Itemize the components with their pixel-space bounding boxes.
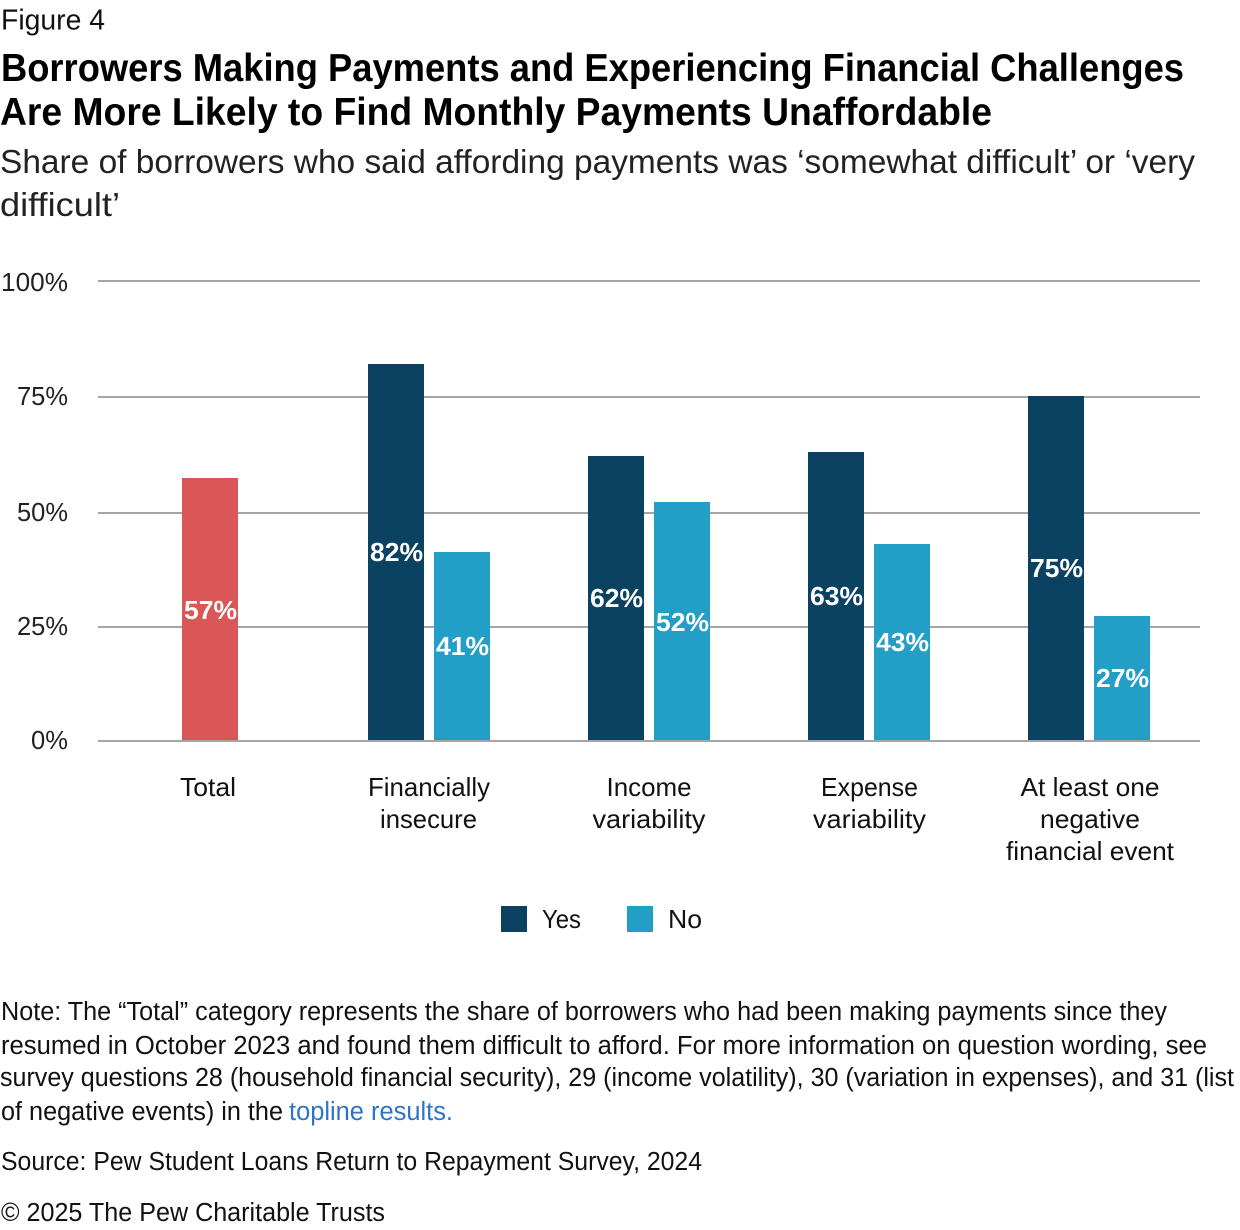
note: resumed in October 2023 and found them difficult to afford. For more information on question wording, see	[1, 1032, 1207, 1060]
y axis and grid lines: 50%	[17, 497, 68, 527]
group: income variability: 52%	[656, 607, 709, 637]
y axis and grid lines	[1, 267, 1200, 755]
group: at least one negative financial event: At least one	[1020, 772, 1160, 802]
note: of negative events) in the	[1, 1098, 283, 1126]
group: financially insecure: 41%	[436, 631, 489, 661]
group: financially insecure: insecure	[380, 804, 477, 834]
note: topline results.	[289, 1098, 453, 1126]
y axis and grid lines: 0%	[31, 725, 68, 755]
group: income variability	[588, 456, 710, 834]
note: survey questions 28 (household financial security), 29 (income volatility), 30 (variation in expenses), and 31 (list	[0, 1064, 1234, 1092]
group: expense variability: 43%	[876, 627, 929, 657]
group: total: Total	[180, 772, 236, 802]
group: at least one negative financial event: 27%	[1096, 663, 1149, 693]
group: total: 57%	[184, 595, 237, 625]
figure number: Figure 4	[1, 4, 105, 36]
group: total	[180, 478, 238, 802]
group: expense variability: variability	[813, 804, 926, 834]
y axis and grid lines: 25%	[17, 611, 68, 641]
subtitle	[0, 143, 1195, 223]
group: expense variability	[808, 452, 930, 834]
legend	[501, 904, 702, 934]
subtitle: difficult’	[0, 186, 120, 223]
bar chart	[1, 267, 1200, 866]
group: financially insecure: Financially	[368, 772, 490, 802]
group: at least one negative financial event: negative	[1040, 804, 1140, 834]
title: Borrowers Making Payments and Experiencing Financial Challenges	[1, 47, 1184, 90]
y axis and grid lines: 100%	[1, 267, 68, 297]
group: at least one negative financial event	[1006, 396, 1175, 866]
group: at least one negative financial event: financial event	[1006, 836, 1175, 866]
title	[0, 47, 1184, 134]
copyright: © 2025 The Pew Charitable Trusts	[1, 1199, 385, 1227]
note	[0, 998, 1234, 1126]
source: Source: Pew Student Loans Return to Repayment Survey, 2024	[1, 1148, 702, 1176]
y axis and grid lines: 75%	[17, 381, 68, 411]
subtitle: Share of borrowers who said affording payments was ‘somewhat difficult’ or ‘very	[0, 143, 1195, 180]
note: Note: The “Total” category represents the share of borrowers who had been making payments since they	[1, 998, 1167, 1026]
group: financially insecure: 82%	[370, 537, 423, 567]
title: Are More Likely to Find Monthly Payments Unaffordable	[0, 91, 992, 134]
group: expense variability: Expense	[821, 772, 918, 802]
group: income variability: 62%	[590, 583, 643, 613]
group: financially insecure	[368, 364, 490, 834]
legend: No	[668, 904, 702, 934]
group: income variability: Income	[606, 772, 692, 802]
group: income variability: variability	[592, 804, 706, 834]
group: expense variability: 63%	[810, 581, 863, 611]
legend: Yes	[542, 904, 581, 934]
group: at least one negative financial event: 75%	[1030, 553, 1083, 583]
